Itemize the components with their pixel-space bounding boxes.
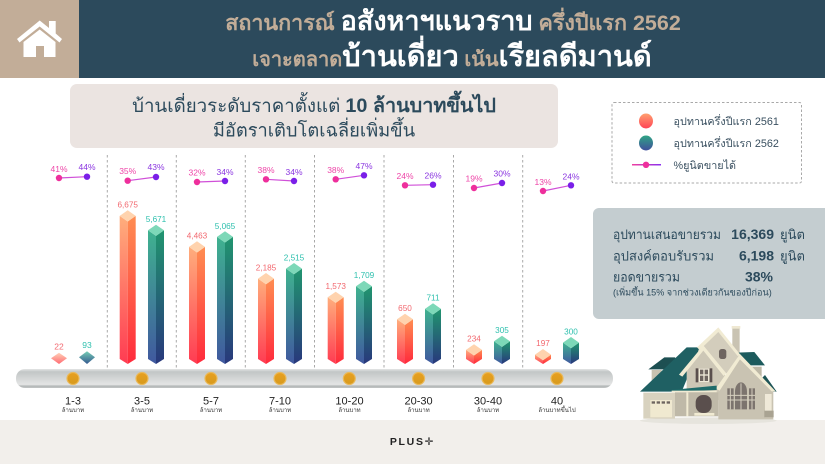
group: 3-5 million baht (117, 162, 167, 414)
sold line 20-30 (396, 170, 442, 188)
header band (0, 0, 825, 78)
bar 2561: 650 (397, 304, 413, 364)
axis label 20-30 (405, 396, 433, 414)
sold line 30-40: 30% (493, 168, 511, 178)
bar 2562: 2,515 (284, 254, 305, 364)
bar 2562: 2,515: 2,515 (284, 254, 305, 262)
sold line 3-5 (119, 162, 165, 184)
sold line 10-20: 47% (355, 161, 373, 171)
group: 5-7 million baht (187, 167, 236, 414)
stats panel: (เพิ่มขึ้น 15% จากช่วงเดียวกันของปีก่อน) (613, 286, 772, 298)
sold line 1-3 (50, 162, 96, 181)
bar 2562: 1,709 (354, 271, 375, 364)
sold line 10-20: 38% (327, 165, 345, 175)
bar 2562: 711 (425, 294, 441, 364)
sold line 40+: 13% (534, 177, 552, 187)
axis label 30-40: ล้านบาท (477, 407, 499, 414)
bar 2562: 1,709: 1,709 (354, 271, 375, 280)
bar 2562: 5,671 (146, 215, 167, 364)
axis label 10-20: ล้านบาท (338, 407, 361, 414)
subtitle callout: บ้านเดี่ยวระดับราคาตั้งแต่ 10 ล้านบาทขึ้นไป (132, 90, 496, 117)
stats panel (593, 208, 825, 319)
axis label 1-3 (62, 396, 84, 414)
sold line 40+: 24% (562, 172, 580, 182)
bar 2562: 300 (563, 328, 579, 364)
axis label 20-30: 20-30 (405, 396, 433, 408)
bar 2562: 711: 711 (426, 294, 440, 302)
bar 2561: 4,463 (187, 232, 208, 364)
stats panel: 16,369 (731, 226, 774, 242)
bar 2562: 300: 300 (564, 328, 578, 336)
bar 2562: 305 (494, 326, 510, 364)
legend: อุปทานครึ่งปีแรก 2562 (674, 136, 779, 150)
axis label 7-10: ล้านบาท (269, 407, 291, 414)
sold line 7-10 (257, 165, 303, 184)
group: 10-20 million baht (325, 161, 375, 414)
group: 20-30 million baht (396, 170, 442, 414)
sold line 3-5: 35% (119, 166, 137, 176)
axis label 30-40: 30-40 (474, 396, 502, 408)
footer band: PLUS✛ (390, 436, 435, 448)
stats panel: ยอดขายรวม (613, 270, 680, 284)
axis label 7-10: 7-10 (269, 396, 291, 408)
stats panel: อุปทานเสนอขายรวม (613, 227, 721, 243)
subtitle callout: มีอัตราเติบโตเฉลี่ยเพิ่มขึ้น (213, 116, 416, 140)
bar 2562: 5,065 (215, 222, 236, 364)
bar 2561: 6,675 (117, 200, 138, 364)
axis label 10-20: 10-20 (335, 396, 364, 408)
stats panel: ยูนิต (780, 227, 805, 243)
axis label 3-5: 3-5 (134, 396, 150, 408)
stats panel: 38% (745, 268, 774, 284)
bar 2562: 93: 93 (82, 340, 92, 350)
legend: อุปทานครึ่งปีแรก 2561 (674, 114, 779, 128)
sold line 40+ (534, 172, 580, 194)
sold line 1-3: 41% (50, 164, 68, 174)
legend (612, 102, 802, 183)
bar 2562: 5,671: 5,671 (146, 215, 167, 224)
bar 2561: 197 (535, 339, 551, 364)
sold line 30-40: 19% (465, 174, 483, 184)
sold line 20-30: 26% (424, 170, 442, 180)
axis label 5-7: ล้านบาท (200, 407, 222, 414)
axis label 1-3: ล้านบาท (62, 407, 84, 414)
sold line 20-30: 24% (396, 171, 414, 181)
axis label 1-3: 1-3 (65, 396, 81, 408)
bar 2561: 22: 22 (54, 342, 64, 352)
bar 2562: 93 (79, 340, 95, 364)
sold line 5-7 (188, 167, 234, 185)
axis label 40+: ล้านบาทขึ้นไป (538, 404, 576, 414)
subtitle callout (70, 84, 558, 148)
bar 2561: 4,463: 4,463 (187, 232, 208, 240)
sold line 5-7: 34% (216, 167, 234, 177)
bar 2561: 1,573: 1,573 (325, 282, 346, 291)
icon panel: house (0, 0, 79, 78)
illustration: house (640, 326, 777, 424)
stats panel: 6,198 (739, 248, 774, 264)
group: 30-40 million baht (465, 168, 511, 414)
sold line 1-3: 44% (78, 162, 96, 172)
stats panel: ยูนิต (780, 248, 805, 264)
bar 2562: 5,065: 5,065 (215, 222, 236, 231)
bar 2561: 22 (51, 342, 67, 364)
group: 40+ million baht (534, 172, 580, 414)
sold line 7-10: 34% (285, 167, 303, 177)
sold line 30-40 (465, 168, 511, 191)
group: 7-10 million baht (256, 165, 305, 414)
bar 2561: 2,185: 2,185 (256, 264, 277, 272)
axis label 5-7 (200, 396, 222, 414)
axis label 3-5 (131, 396, 153, 414)
axis label 5-7: 5-7 (203, 396, 219, 408)
sold line 5-7: 32% (188, 168, 206, 178)
title line 2: เจาะตลาดบ้านเดี่ยว เน้นเรียลดีมานด์ (252, 35, 652, 73)
bar 2562: 305: 305 (495, 326, 509, 335)
bar 2561: 234: 234 (467, 334, 481, 344)
axis label 40+ (538, 396, 576, 414)
group: 1-3 million baht (50, 162, 96, 414)
bar 2561: 6,675: 6,675 (117, 200, 138, 210)
legend: %ยูนิตขายได้ (674, 159, 736, 172)
bar 2561: 1,573 (325, 282, 346, 364)
footer band (0, 420, 825, 464)
axis label 7-10 (269, 396, 291, 414)
bar 2561: 234 (466, 334, 482, 364)
axis label 20-30: ล้านบาท (407, 407, 430, 414)
axis label 30-40 (474, 396, 502, 414)
title line 1: สถานการณ์ อสังหาฯแนวราบ ครึ่งปีแรก 2562 (225, 6, 681, 36)
sold line 7-10: 38% (257, 165, 275, 175)
axis label 10-20 (335, 396, 364, 414)
sold line 10-20 (327, 161, 373, 182)
bar 2561: 197: 197 (536, 339, 550, 348)
axis label 3-5: ล้านบาท (131, 407, 153, 414)
timeline rail (16, 369, 613, 388)
bar 2561: 650: 650 (398, 304, 412, 313)
axis label 40+: 40 (551, 396, 563, 408)
bar 2561: 2,185 (256, 264, 277, 364)
stats panel: อุปสงค์ตอบรับรวม (613, 248, 714, 264)
sold line 3-5: 43% (147, 162, 165, 172)
